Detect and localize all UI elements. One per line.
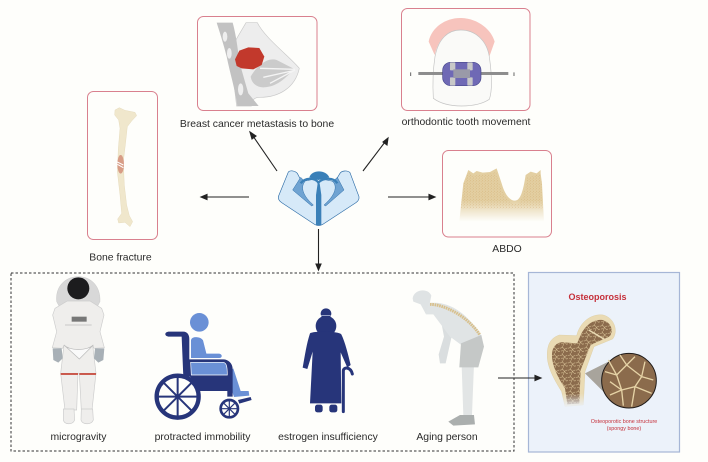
label: estrogen insufficiency: estrogen insufficiency (278, 432, 379, 443)
panel: breast cancer metastasis (180, 16, 334, 130)
arrow to causes box (316, 229, 321, 270)
icon: wheelchair (157, 313, 252, 418)
icon: alveolar bone defect (459, 168, 544, 222)
heading: osteoporosis: Osteoporosis (568, 292, 627, 302)
panel: osteoporosis (528, 272, 680, 452)
arrow to osteoporosis (498, 376, 541, 380)
panel: bone fracture (88, 92, 158, 264)
label: aging person: Aging person (416, 432, 478, 443)
icon: central bone device (278, 171, 359, 225)
label: protracted immobility: protracted immobility (155, 432, 251, 443)
icon: breast cross-section with tumour (217, 23, 299, 106)
icon: fractured long bone (115, 108, 137, 227)
panel: ABDO (442, 150, 552, 255)
label: microgravity: microgravity (50, 432, 107, 443)
icon: femur with zoom lens (547, 315, 656, 408)
panel: orthodontic tooth movement (402, 8, 531, 128)
arrow to ABDO (388, 194, 435, 200)
icon: astronaut (52, 277, 104, 424)
panel: causes (11, 273, 514, 451)
arrow to breast panel (250, 132, 277, 171)
icon: elderly woman with cane (303, 308, 352, 412)
label: orthodontic tooth movement: orthodontic tooth movement (402, 117, 531, 128)
caption: osteoporotic bone structure: Osteoporotic bone structure (591, 419, 657, 425)
arrow to bone fracture (201, 194, 249, 200)
icon: aging person with curved spine (413, 290, 484, 426)
icon: tooth with bracket (411, 18, 514, 106)
label: ABDO: ABDO (492, 244, 522, 255)
arrows from central device (201, 132, 435, 270)
label: breast cancer metastasis: Breast cancer metastasis to bone (180, 119, 334, 130)
arrow to tooth panel (363, 138, 388, 171)
label: bone fracture: Bone fracture (89, 252, 152, 264)
caption: spongy bone: (spongy bone) (607, 426, 641, 432)
